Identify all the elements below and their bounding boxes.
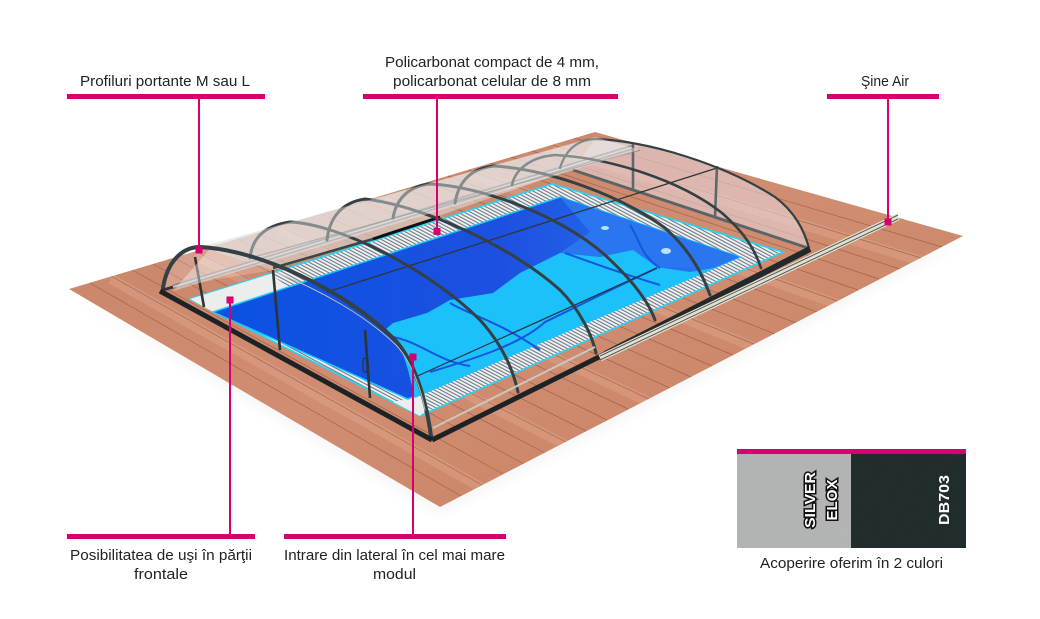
swatch: DB703	[851, 454, 966, 548]
swatch accent bar	[737, 449, 966, 454]
colour swatches	[737, 449, 966, 572]
callout: polycarbonate: Policarbonat compact de 4 mm,	[385, 55, 599, 71]
callout: front doors	[67, 296, 255, 583]
far rail and longitudinal bars	[173, 147, 808, 378]
callout: side entrance: Intrare din lateral în cel mai mare	[284, 548, 505, 564]
arched ribs	[250, 139, 809, 392]
glass canopy panels	[163, 139, 809, 288]
wooden deck	[69, 132, 963, 507]
pool coping	[190, 184, 783, 416]
glass haze over far rib legs	[173, 137, 640, 291]
callout: air rail: Şine Air	[861, 74, 909, 90]
upright door posts	[195, 143, 717, 398]
swatch: silver elox: SILVER	[802, 472, 819, 528]
callout: support profiles	[67, 74, 265, 254]
callout: polycarbonate: policarbonat celular de 8 mm	[393, 74, 591, 90]
callout: side entrance: modul	[373, 567, 416, 583]
callout: polycarbonate	[363, 55, 618, 235]
front arch rib	[163, 247, 431, 436]
deck shadow	[69, 242, 963, 514]
callout: front doors: frontale	[134, 567, 188, 583]
callout: side entrance	[284, 354, 506, 583]
callout: support profiles: Profiluri portante M sau L	[80, 74, 250, 90]
infographic: pool enclosure with callouts	[67, 56, 966, 579]
swatch caption: Acoperire oferim în 2 culori	[760, 556, 943, 572]
swatch: DB703: DB703	[936, 475, 953, 525]
swatch: silver elox: ELOX	[824, 480, 841, 520]
air rail	[600, 215, 898, 360]
callout: front doors: Posibilitatea de uşi în părţii	[70, 548, 252, 564]
swatch: silver elox	[737, 454, 851, 548]
callout: air rail	[827, 74, 939, 226]
frame base rails	[160, 249, 810, 440]
pool water	[213, 197, 740, 399]
